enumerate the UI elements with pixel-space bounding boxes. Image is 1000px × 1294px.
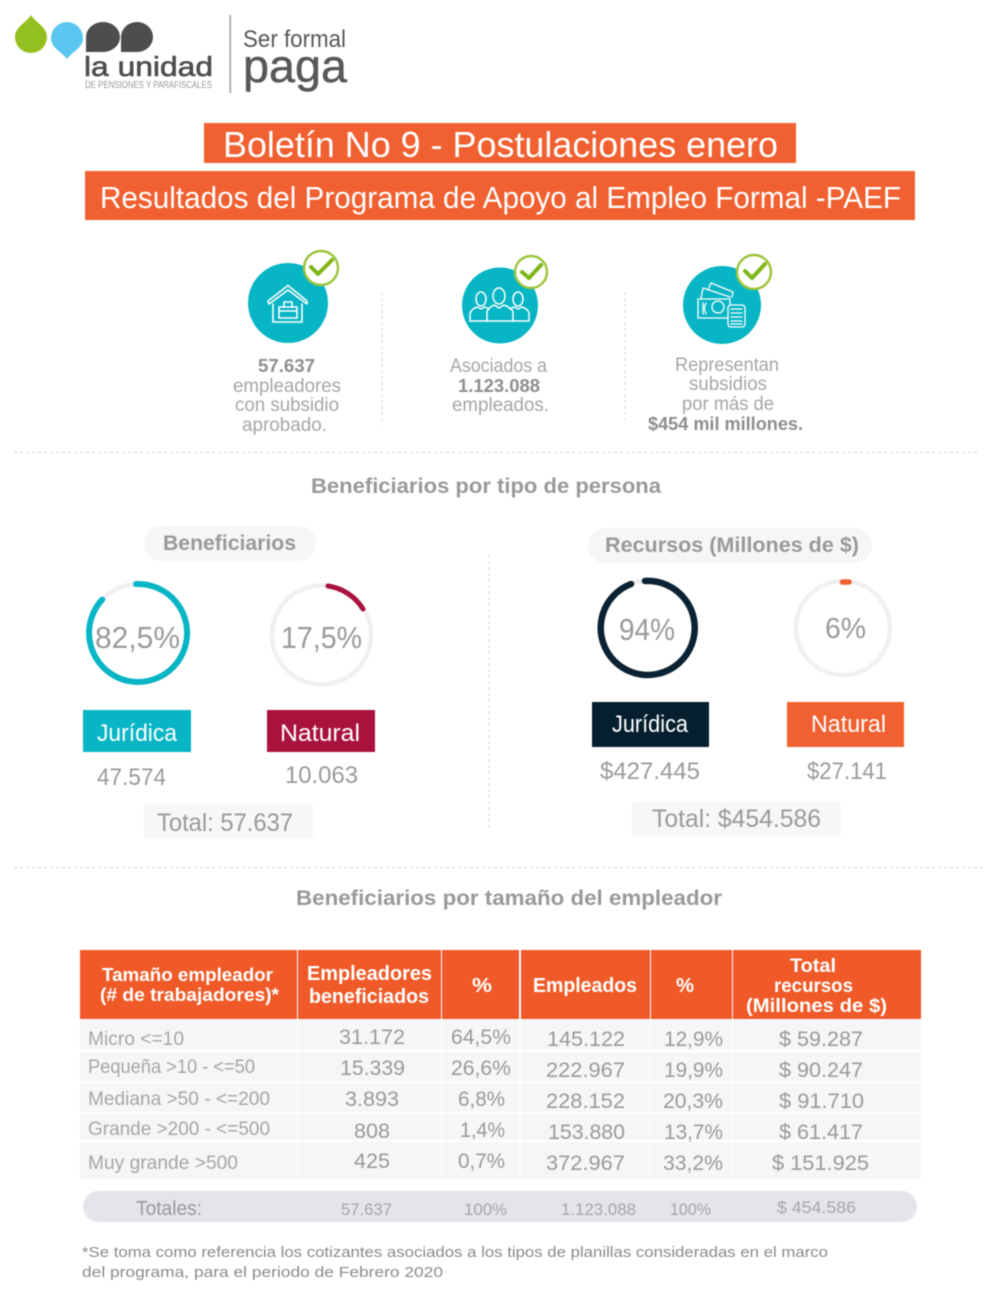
stat: empleados [450,256,549,416]
stat: subsidios: subsidios [689,374,767,395]
label: Natural [267,710,375,752]
row: Pequeña: $ 90.247 [779,1059,863,1082]
pill heading: Recursos: Recursos (Millones de $) [605,534,859,557]
footnote: *Se toma como referencia los cotizantes asociados a los tipos de planillas consideradas en el marco [82,1244,828,1261]
row: Muy grande [88,1150,869,1175]
row: Grande: 153.880 [548,1121,625,1144]
label: Natural: Natural [811,711,886,738]
table header: % [472,975,492,997]
row: Muy grande: $ 151.925 [772,1152,869,1175]
title: Boletín: Boletín No 9 - Postulaciones enero [223,124,778,165]
totals bar: 1.123.088 [561,1200,636,1219]
logo: Ser formal paga: paga [243,40,347,92]
stat: empleadores: 57.637 [258,356,315,376]
donut: 6% Natural [796,581,890,675]
totals bar: $ 454.586 [777,1198,856,1217]
heading: Beneficiarios por tamaño del empleador: Beneficiarios por tamaño del empleador [296,887,722,910]
row: Micro: 31.172 [339,1026,405,1049]
subtitle: Resultados del Programa: Resultados del Programa de Apoyo al Empleo Formal -PAEF [100,180,901,215]
total: 57.637: Total: 57.637 [157,809,293,837]
logo: Ser formal paga [230,15,347,93]
panel: beneficiarios [83,526,375,839]
total: $454.586 [632,802,841,836]
heading: Beneficiarios por tipo de persona: Beneficiarios por tipo de persona [311,475,661,498]
row: Pequeña: Pequeña >10 - <=50 [88,1057,255,1078]
row: Micro: 12,9% [664,1028,723,1051]
row: Grande [88,1119,863,1144]
stat: empleados: empleados. [452,395,549,416]
stat: empleados: Asociados a [450,356,547,377]
icon: house with briefcase [248,251,338,343]
stat: empleadores: aprobado. [242,415,327,436]
panel: recursos [588,528,904,836]
logo: la unidad [15,15,213,91]
stat: subsidios: por más de [682,394,774,415]
stat: subsidios: $454 mil millones. [648,414,803,434]
donut: 94% Jurídica: 94% [619,612,675,647]
row: Mediana: 228.152 [546,1090,625,1113]
stat: empleadores: con subsidio [235,395,339,416]
row: Mediana: Mediana >50 - <=200 [88,1089,270,1110]
row: Mediana [88,1088,864,1113]
row: Micro [88,1026,863,1051]
donut: 82,5% Jurídica [89,584,187,682]
row: Muy grande: Muy grande >500 [88,1153,238,1174]
label: Jurídica: Jurídica [97,720,178,747]
row: Mediana: $ 91.710 [779,1090,864,1113]
row: Micro: 145.122 [547,1028,625,1051]
total: $454.586: Total: $454.586 [652,805,821,833]
table header: (Millones de $) [746,996,887,1017]
logo: la unidad: DE PENSIONES Y PARAFISCALES [85,80,212,91]
table header: (# de trabajadores)* [100,985,279,1005]
donut: 17,5% Natural: 17,5% [281,620,362,655]
totals bar: 100% [464,1200,507,1219]
value: $27.141: $27.141 [807,758,887,785]
total: 57.637 [144,804,313,839]
row: Pequeña: 19,9% [664,1059,723,1082]
pill heading: Beneficiarios [144,526,316,561]
table header: Empleadores [307,963,432,985]
value: 10.063: 10.063 [285,762,358,789]
row: Muy grande: 33,2% [663,1152,723,1175]
table header [80,950,921,1019]
row: Mediana: 20,3% [663,1090,723,1113]
table: beneficiarios por tamaño [80,950,921,1179]
totals bar: 100% [670,1200,711,1219]
label: Natural [787,702,904,747]
row: Pequeña: 26,6% [451,1057,511,1080]
icon: money and coins [683,255,771,344]
totals bar: 57.637 [341,1200,392,1219]
donut: 17,5% Natural [272,586,371,684]
pill heading: Beneficiarios: Beneficiarios [163,532,296,555]
stat: empleados: 1.123.088 [458,376,540,396]
table header: beneficiados [309,986,429,1008]
logo: Ser formal paga: Ser formal [243,26,346,53]
totals bar [83,1191,917,1222]
label: Jurídica: Jurídica [612,711,689,738]
stat: empleadores: empleadores [233,376,341,397]
pill heading: Recursos [588,528,872,563]
donut: 6% Natural: 6% [825,613,866,645]
row: Micro: $ 59.287 [779,1028,863,1051]
row: Grande: 13,7% [664,1121,723,1144]
icon: three people [462,256,547,344]
label: Jurídica [83,710,191,752]
row: Muy grande: 0,7% [458,1150,505,1173]
row: Micro: 64,5% [451,1026,511,1049]
label: Natural: Natural [280,720,360,747]
row: Mediana: 3.893 [345,1088,399,1111]
donut: 82,5% Jurídica: 82,5% [95,620,180,655]
row: Grande: 1,4% [460,1119,505,1142]
row: Mediana: 6,8% [458,1088,505,1111]
stat: subsidios: Representan [675,355,779,376]
donut: 94% Jurídica [600,581,695,675]
table row backgrounds [80,1020,921,1179]
value: $427.445: $427.445 [600,758,700,785]
row: Pequeña: 222.967 [546,1059,625,1082]
row: Grande: 808 [354,1120,390,1143]
row: Muy grande: 372.967 [546,1152,625,1175]
row: Grande: $ 61.417 [779,1121,863,1144]
table header: Total [790,956,836,977]
value: 47.574: 47.574 [97,764,166,791]
row: Pequeña: 15.339 [340,1057,405,1080]
table header: recursos [774,976,853,997]
subtitle: Resultados del Programa [85,171,915,220]
row: Pequeña [88,1057,863,1082]
table header: Tamaño empleador [102,965,273,985]
row: Micro: Micro <=10 [88,1029,184,1050]
row: Grande: Grande >200 - <=500 [88,1119,270,1140]
label: Jurídica [592,702,709,747]
table header: % [676,975,694,997]
footnote: del programa, para el periodo de Febrero 2020 [82,1264,443,1281]
stat: empleadores [233,251,341,436]
row: Muy grande: 425 [354,1150,390,1173]
totals bar: Totales: [136,1198,202,1220]
footnote [82,1244,828,1281]
stat: subsidios [648,255,803,434]
table header: Empleados [533,975,637,997]
logo: la unidad: la unidad [84,51,213,82]
